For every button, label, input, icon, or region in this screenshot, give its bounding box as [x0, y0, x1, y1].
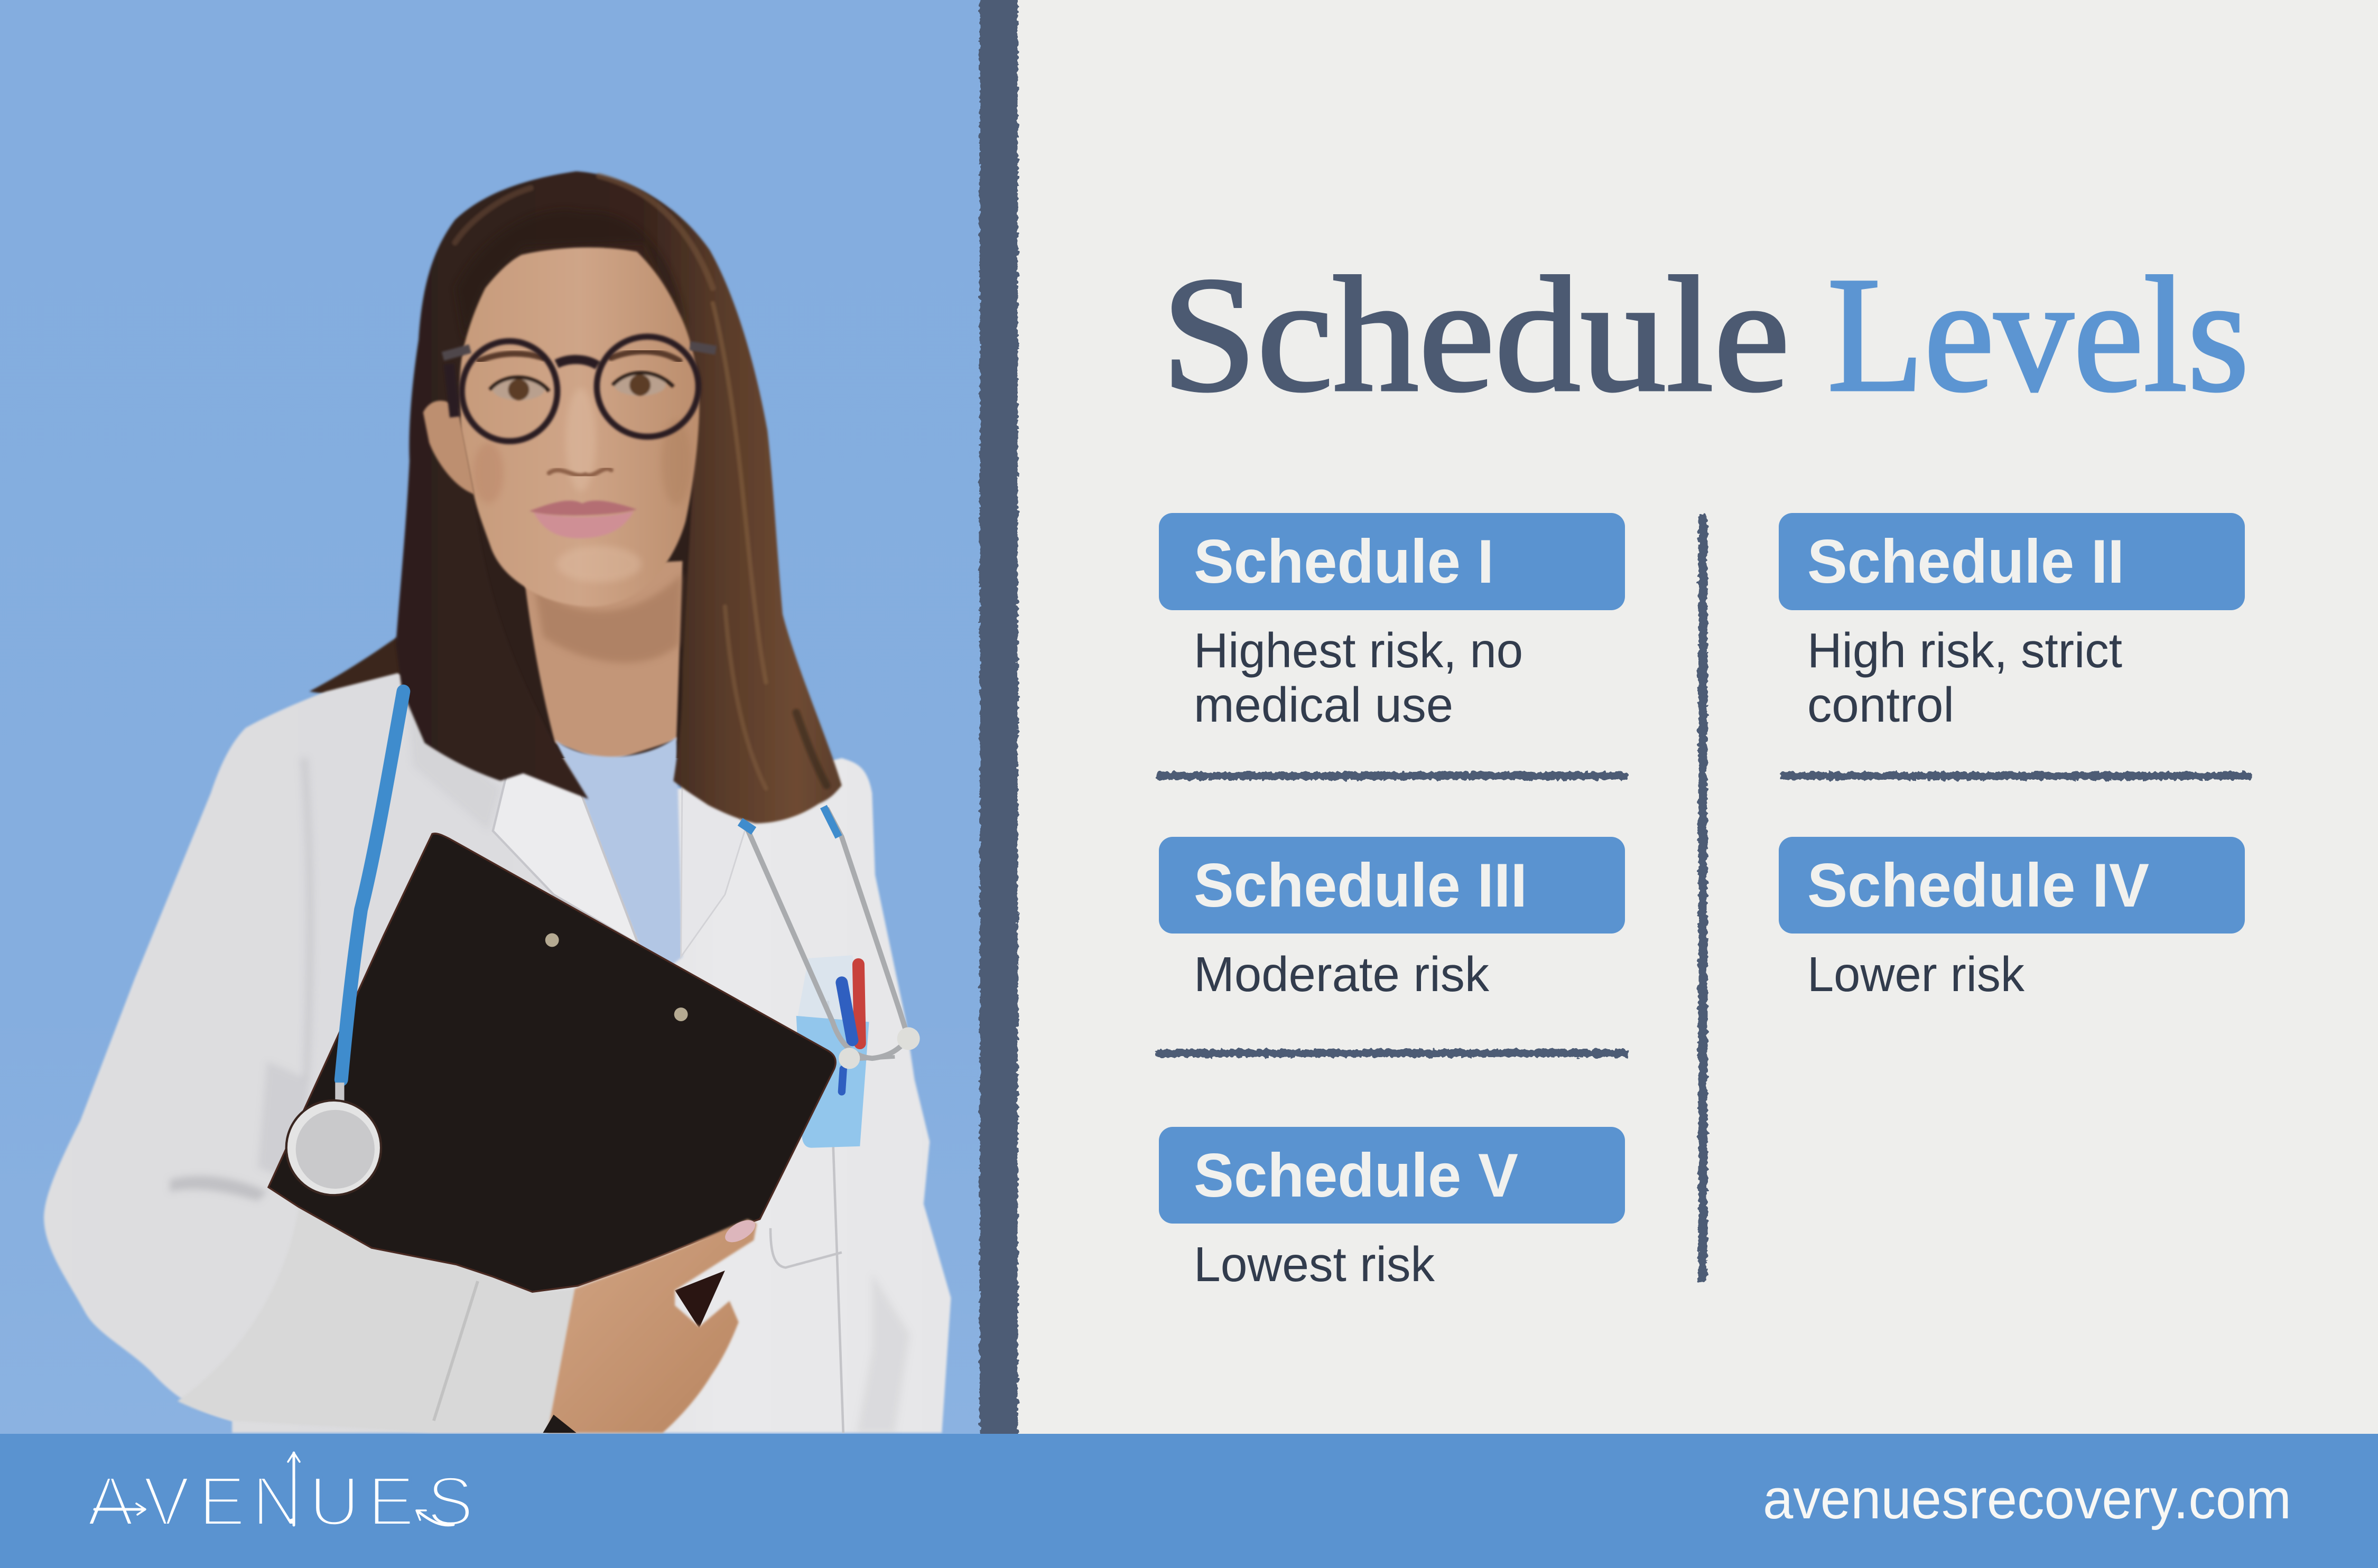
cuff seam — [434, 1281, 478, 1421]
title: Levels — [1827, 244, 2249, 426]
schedule V card — [1159, 1127, 1625, 1292]
fingernail — [721, 1216, 759, 1247]
coat pocket — [796, 955, 869, 1148]
schedule I card — [1159, 513, 1625, 732]
logo: Avenues: AVENUES — [87, 1462, 473, 1540]
schedule V card: Schedule V — [1194, 1141, 1518, 1210]
right lapel — [681, 739, 746, 957]
clipboard under hand — [675, 1271, 725, 1328]
schedule IV card: Lower risk — [1807, 947, 2024, 1002]
schedule I card: Schedule I — [1194, 527, 1494, 596]
schedule II card — [1779, 513, 2245, 732]
title — [1162, 244, 2249, 426]
logo arrows — [95, 1453, 453, 1525]
stethoscope chest piece — [285, 1082, 382, 1196]
schedule III card — [1159, 837, 1625, 1002]
lips — [530, 501, 637, 538]
coat shading — [170, 690, 910, 1433]
schedule I card: Highest risk, no — [1194, 623, 1523, 678]
back hair behind neck — [432, 319, 705, 758]
panel: footer band — [0, 1434, 2378, 1568]
hand — [547, 1219, 757, 1433]
schedule III card: Moderate risk — [1194, 947, 1489, 1002]
hair dark parting — [455, 209, 685, 341]
neck — [523, 561, 683, 763]
clipboard rivets — [545, 933, 688, 1021]
blue stethoscope tube — [341, 692, 403, 1079]
schedule IV card — [1779, 837, 2245, 1002]
face — [460, 247, 699, 606]
schedule I card: medical use — [1194, 677, 1453, 732]
glasses — [443, 337, 716, 441]
photo: doctor in white coat — [44, 171, 951, 1433]
silver stethoscope tubes — [746, 808, 908, 1060]
eyes — [490, 373, 673, 400]
title: Schedule — [1162, 244, 1790, 426]
vertical rough stripe — [980, 0, 1018, 1437]
eyebrows — [479, 351, 680, 361]
ribbed shirt — [555, 737, 683, 967]
schedule IV card: Schedule IV — [1807, 851, 2149, 920]
ear — [423, 400, 475, 494]
lower coat pocket outline — [770, 1001, 843, 1433]
stethoscope ear tips — [740, 807, 920, 1069]
nose — [549, 469, 611, 475]
clipboard bottom corner — [543, 1415, 577, 1433]
schedule II card: control — [1807, 677, 1954, 732]
schedule III card: Schedule III — [1194, 851, 1527, 920]
schedule II card: High risk, strict — [1807, 623, 2122, 678]
pens — [842, 964, 860, 1091]
schedule V card: Lowest risk — [1194, 1237, 1435, 1292]
back hair strand — [309, 637, 432, 713]
main hair — [396, 171, 842, 823]
white coat — [44, 673, 951, 1433]
sleeve cuff — [178, 1207, 578, 1433]
cheek shading — [473, 388, 692, 582]
left lapel — [493, 713, 638, 945]
clipboard — [268, 834, 835, 1292]
schedule II card: Schedule II — [1807, 527, 2124, 596]
website url: avenuesrecovery.com — [1763, 1467, 2291, 1530]
panel: blue photo background — [0, 0, 983, 1435]
neck shadow — [534, 573, 683, 662]
hair strands — [455, 176, 826, 788]
